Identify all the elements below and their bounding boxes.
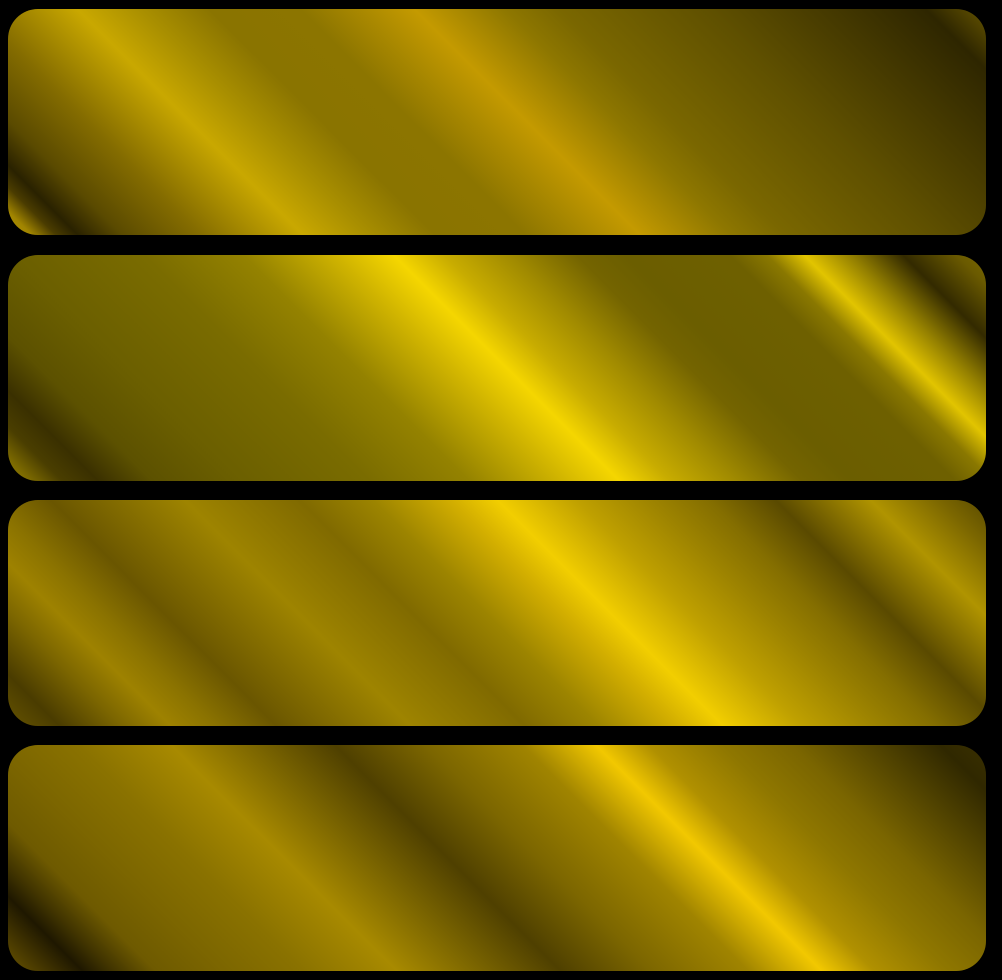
panel: gold banner 2 [8,255,986,481]
panel: gold banner 4 [8,745,986,971]
panel: gold banner 3 [8,500,986,726]
panel: gold banner 1 [8,9,986,235]
